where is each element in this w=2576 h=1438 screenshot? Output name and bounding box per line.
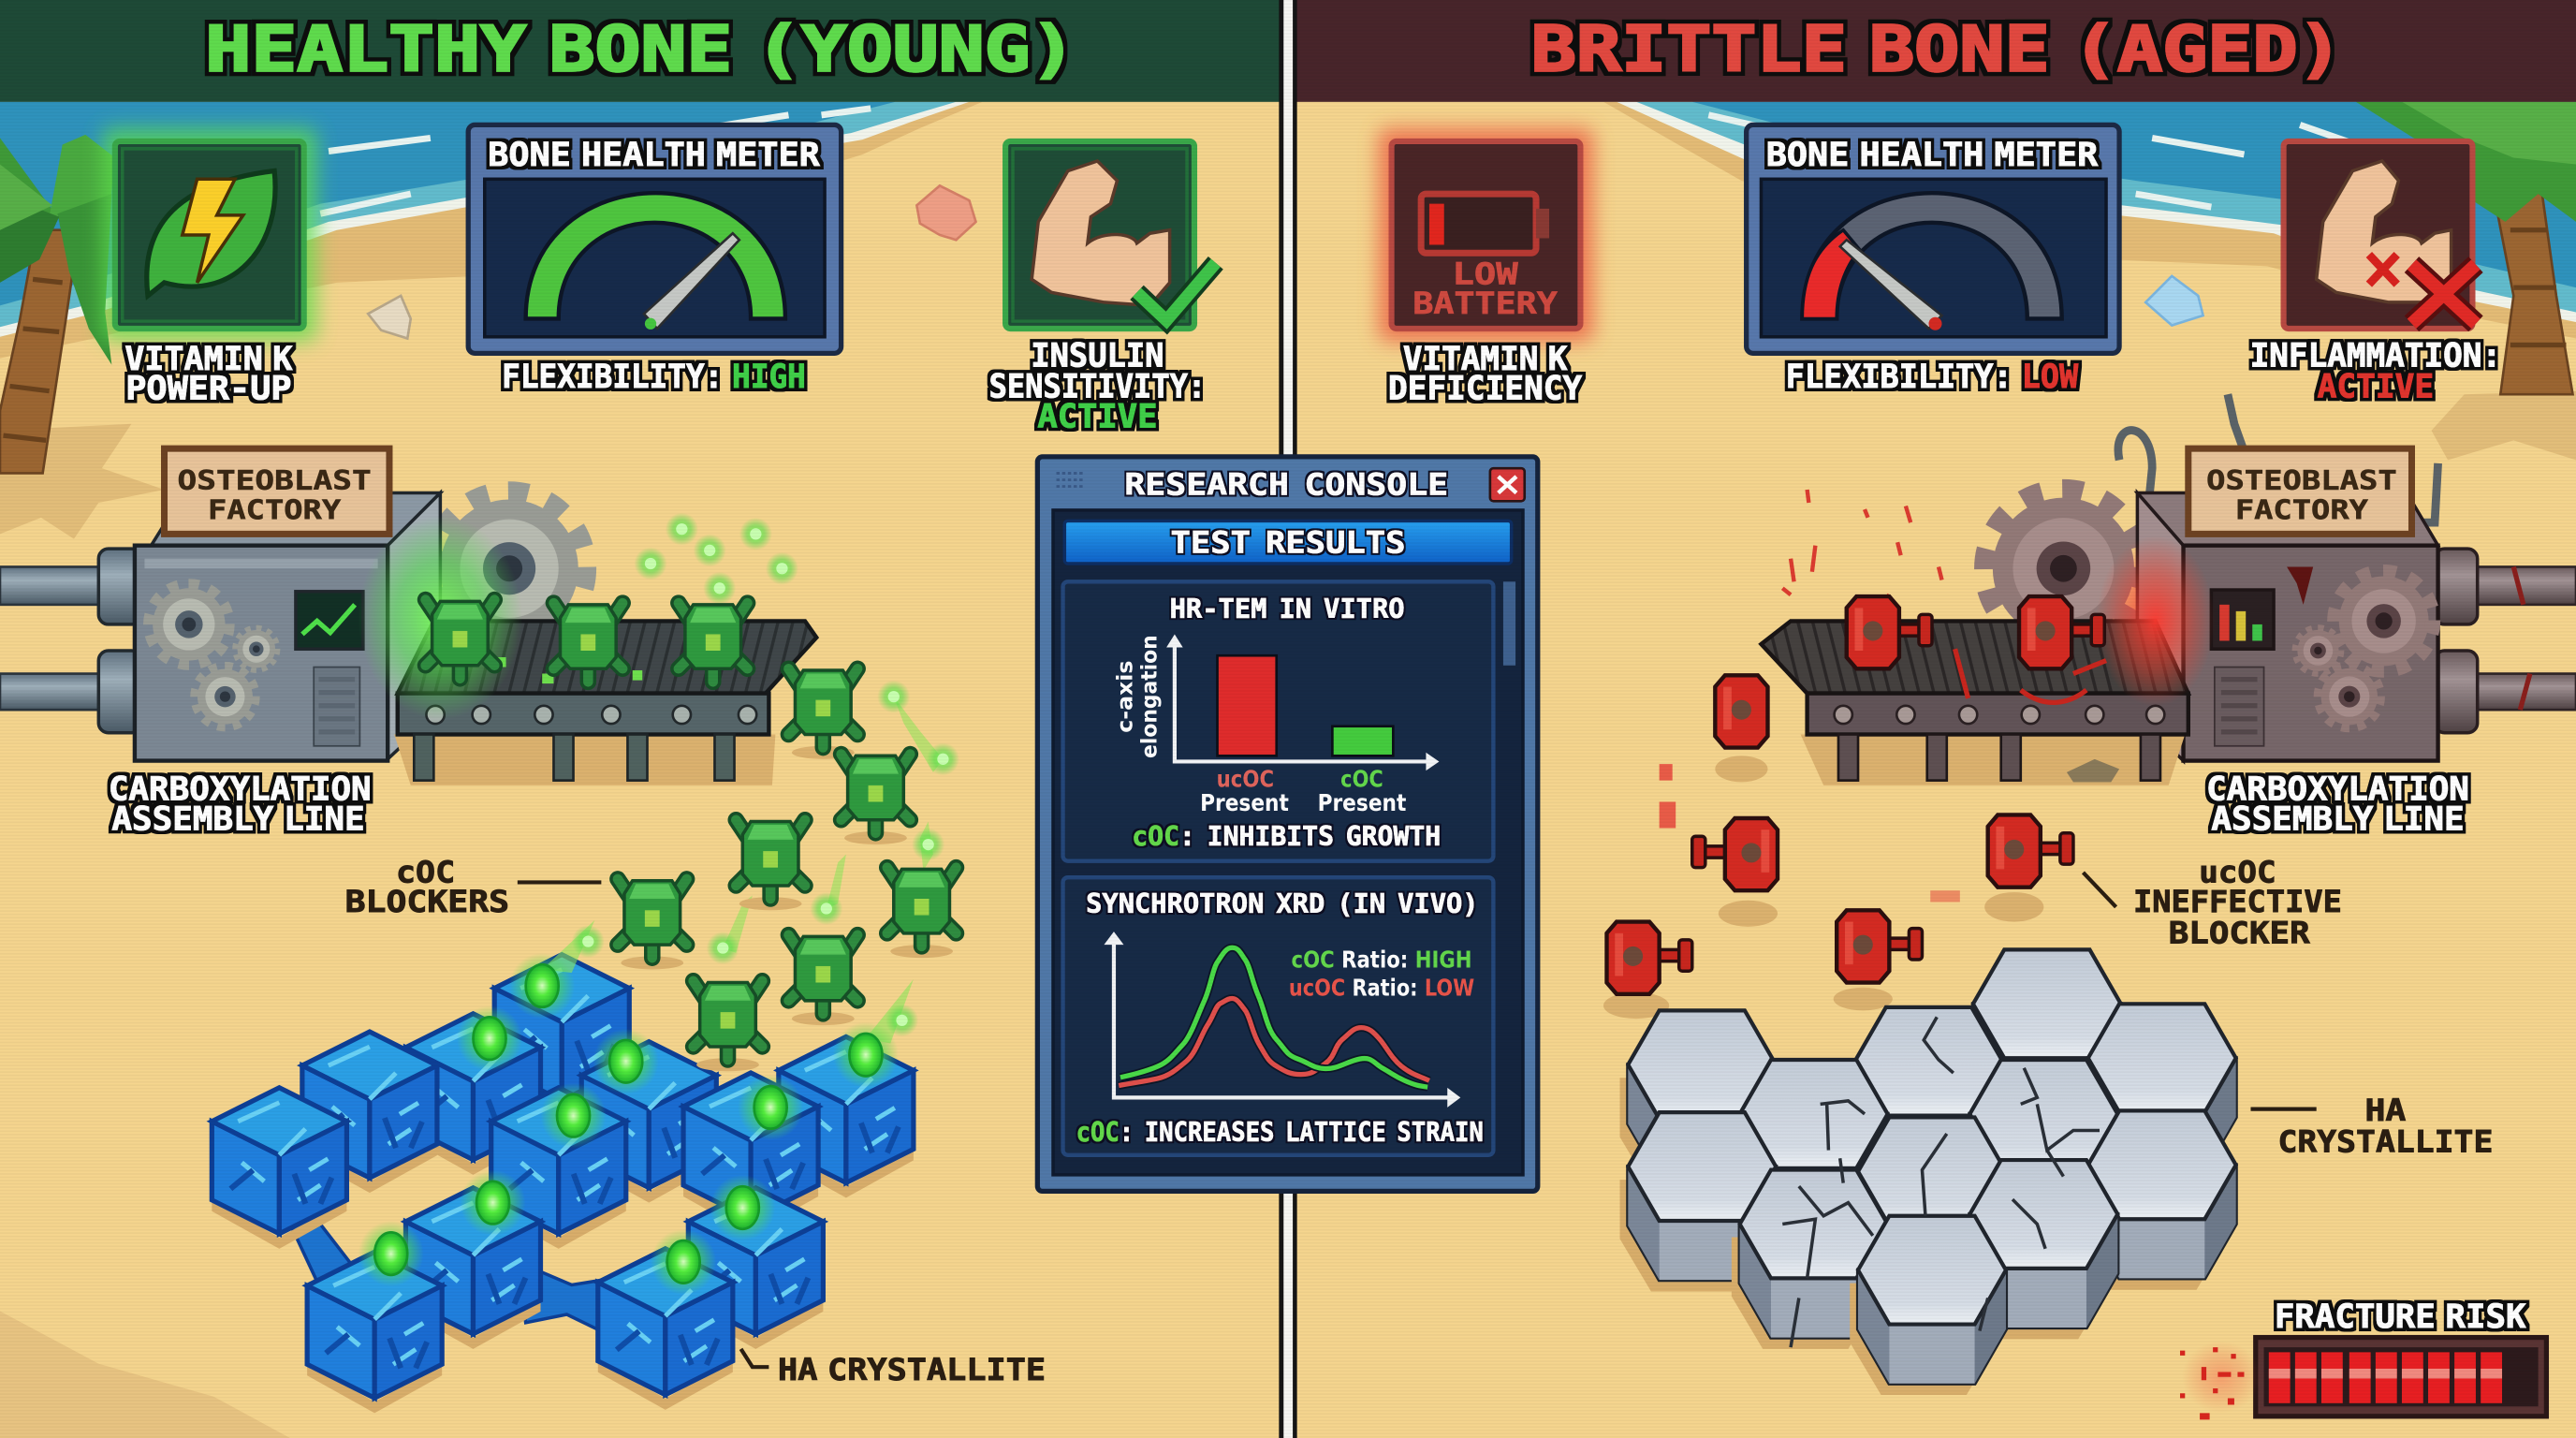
shell: white [368, 296, 411, 339]
gauge arc: grey [1802, 193, 2062, 318]
ucOC ineffective blockers [1603, 596, 2104, 1019]
red trail [1660, 764, 1960, 902]
sign: OSTEOBLAST [178, 465, 372, 496]
icon: flexed arm [1032, 161, 1170, 305]
test results button: TEST RESULTS [1171, 527, 1405, 561]
label: vitamin K power-up [124, 340, 292, 407]
label: carboxylation assembly line left: ASSEMBLY LINE [111, 800, 365, 838]
icon panel: insulin sensitivity [1005, 141, 1216, 329]
bar: ucOC [1218, 655, 1277, 756]
icon: lightning bolt [183, 179, 243, 283]
label: ucOC ineffective blocker [2083, 856, 2342, 950]
label: vitamin K power-up: VITAMIN K [124, 340, 292, 378]
axis label: c-axis [1113, 661, 1137, 733]
blocker shadows [621, 746, 953, 1071]
label: cOC blockers: BLOCKERS [345, 886, 509, 919]
curve: cOC [1120, 947, 1427, 1087]
label: HA crystallite right: CRYSTALLITE [2277, 1125, 2493, 1159]
right sea [1603, 102, 2576, 339]
green sparks [572, 513, 959, 1036]
label: vitamin K power-up: POWER-UP [125, 369, 292, 407]
cracks [1782, 1017, 2100, 1347]
label: insulin sensitivity active [989, 336, 1206, 435]
label: flexibility low: FLEXIBILITY: LOW [1786, 358, 2079, 396]
conveyor shadow [1801, 734, 2185, 785]
pipes [0, 549, 141, 733]
fracture risk meter: FRACTURE RISK [2275, 1298, 2525, 1336]
sign: FACTORY [208, 495, 341, 526]
shell: blue [2145, 276, 2203, 325]
header right bar [1296, 0, 2576, 102]
sign [2188, 448, 2411, 534]
finding: cOC: INHIBITS GROWTH [1132, 821, 1441, 852]
label: HA crystallite right: HA [2364, 1094, 2406, 1128]
icon panel: vitamin K power-up [102, 128, 317, 342]
pipes [2435, 549, 2576, 733]
title bar text: RESEARCH CONSOLE [1124, 468, 1448, 502]
meter panel: healthy [468, 125, 842, 353]
big gear [1986, 491, 2141, 646]
vent [2215, 668, 2264, 746]
research console panel [1037, 457, 1538, 1191]
icon panel: inflammation [2284, 141, 2476, 329]
right palm shadow [2432, 391, 2576, 460]
close button [1490, 468, 1525, 501]
gears [2295, 572, 2433, 727]
chart panel: HR-TEM in vitro [1063, 581, 1493, 861]
factory: aged osteoblast [1761, 394, 2576, 785]
conveyor shadow [394, 734, 775, 785]
chart panel: HR-TEM in vitro: elongation [1138, 635, 1163, 758]
crystal links [283, 1208, 644, 1341]
gauge arc: red low section [1802, 230, 1860, 318]
factory body [135, 493, 440, 761]
crystal lattice: healthy HA crystallite [212, 920, 914, 1413]
icon: flexed arm [2317, 161, 2452, 302]
gears [149, 585, 277, 726]
vent [314, 668, 359, 746]
right palm [2356, 102, 2576, 394]
rock [2067, 759, 2119, 782]
title: healthy bone: HEALTHY BONE (YOUNG) [205, 12, 1076, 85]
red particles [2182, 1341, 2261, 1413]
label: inflammation active [2250, 336, 2501, 406]
label: HA crystallite right [2250, 1094, 2493, 1159]
gauge arc: green [526, 193, 785, 318]
icon: green check [1137, 263, 1216, 320]
red glow [2097, 536, 2215, 707]
chart panel: HR-TEM in vitro: Present [1200, 789, 1289, 816]
line chart axes [1114, 938, 1451, 1097]
fracture particles [2180, 1347, 2244, 1419]
chart panel: synchrotron XRD in vivo: ucOC Ratio: LOW [1289, 975, 1474, 1002]
shell: pink [916, 185, 976, 240]
left palm [0, 135, 115, 473]
gauge needle [644, 233, 739, 329]
meter panel: healthy: BONE HEALTH METER [488, 136, 821, 174]
chart panel: synchrotron XRD in vivo [1063, 877, 1493, 1155]
left sea [0, 102, 983, 359]
meter panel: aged [1747, 125, 2119, 353]
label: inflammation active: ACTIVE [2318, 368, 2434, 406]
red sparks over right conveyor [1782, 490, 1942, 608]
conveyor belt [1761, 621, 2188, 781]
factory: healthy osteoblast [0, 448, 816, 785]
left palm shadow [0, 424, 165, 539]
scrollbar [1503, 581, 1515, 666]
legend: cOC Ratio: HIGH [1292, 946, 1472, 974]
bar: cOC [1332, 726, 1393, 756]
sign: FACTORY [2235, 495, 2368, 526]
monitor bars [2211, 590, 2274, 649]
bar labels: ucOC [1217, 766, 1274, 793]
icon: battery [1421, 194, 1536, 253]
curve: ucOC [1119, 999, 1429, 1086]
label: ucOC ineffective blocker: BLOCKER [2169, 917, 2311, 950]
icon panel: low battery: BATTERY [1412, 287, 1558, 321]
green glow [359, 516, 522, 720]
cOC blockers [426, 600, 956, 1060]
center divider [1279, 0, 1297, 1438]
label: insulin sensitivity active: SENSITIVITY: [989, 368, 1206, 406]
meter panel: aged: BONE HEALTH METER [1766, 136, 2099, 174]
chart panel: HR-TEM in vitro: HR-TEM IN VITRO [1170, 594, 1405, 624]
label: vitamin K deficiency: DEFICIENCY [1388, 369, 1582, 407]
chart panel: HR-TEM in vitro: cOC [1340, 766, 1383, 793]
title: brittle bone: BRITTLE BONE (AGED) [1531, 12, 2343, 85]
label: ucOC ineffective blocker: INEFFECTIVE [2133, 886, 2342, 919]
monitor [296, 592, 363, 649]
label: insulin sensitivity active: ACTIVE [1037, 397, 1157, 435]
label: carboxylation assembly line right [2206, 770, 2469, 838]
bar chart axes [1175, 640, 1429, 761]
label: flexibility high: FLEXIBILITY: HIGH [502, 358, 806, 396]
gauge needle [1840, 240, 1942, 329]
header left bar [0, 0, 1280, 102]
icon: big red x [2411, 265, 2476, 324]
sign: OSTEOBLAST [2206, 465, 2397, 496]
pill without stem [1715, 675, 1767, 748]
finding: cOC: INCREASES LATTICE STRAIN [1076, 1117, 1484, 1148]
label: cOC blockers: cOC [396, 856, 455, 889]
label: inflammation active: INFLAMMATION: [2250, 336, 2501, 374]
label: insulin sensitivity active: INSULIN [1031, 336, 1164, 374]
green trails [723, 697, 943, 953]
label: HA crystallite left [741, 1349, 1046, 1387]
sign [165, 448, 389, 534]
chart panel: HR-TEM in vitro: Present [1318, 789, 1407, 816]
label: carboxylation assembly line left [109, 770, 372, 838]
crystal lattice: brittle HA hexagons [1620, 949, 2236, 1395]
conveyor belt [398, 621, 816, 781]
label: cOC blockers [345, 856, 601, 919]
label: vitamin K deficiency [1388, 340, 1582, 407]
factory body [2137, 493, 2438, 761]
bound cOC orbs [359, 920, 914, 1295]
label: carboxylation assembly line right: CARBOXYLATION [2206, 770, 2469, 809]
icon panel: low battery: LOW [1453, 258, 1519, 292]
label: carboxylation assembly line right: ASSEMBLY LINE [2211, 800, 2465, 838]
icon panel: low battery [1379, 128, 1593, 342]
icon: small red x [2369, 255, 2397, 285]
fracture risk meter [2182, 1298, 2546, 1416]
chart panel: synchrotron XRD in vivo: SYNCHROTRON XRD (IN VIVO) [1086, 888, 1479, 919]
label: vitamin K deficiency: VITAMIN K [1403, 340, 1567, 378]
big gear [433, 493, 585, 644]
test results button [1064, 521, 1512, 564]
label: carboxylation assembly line left: CARBOXYLATION [109, 770, 372, 809]
icon: leaf [147, 171, 275, 296]
title bar dots [1057, 473, 1083, 486]
hooks and bolt [2118, 394, 2438, 534]
label: HA crystallite left: HA CRYSTALLITE [778, 1354, 1046, 1387]
darker sand patch [0, 1312, 292, 1438]
label: ucOC ineffective blocker: ucOC [2199, 856, 2276, 889]
